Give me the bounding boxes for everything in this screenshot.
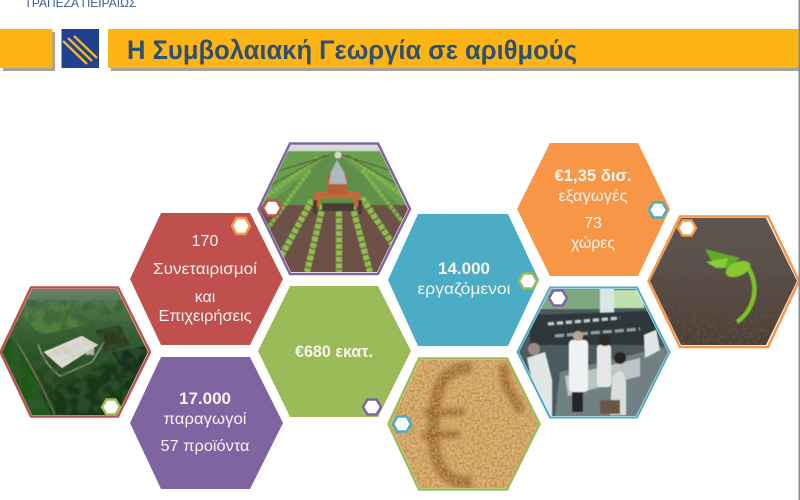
- panel: producers stat: [130, 357, 283, 489]
- panel: wheat euro photo: [388, 358, 541, 490]
- stat text: [153, 233, 257, 325]
- stat text: εργαζόμενοι: [418, 281, 511, 298]
- panel: seedling photo: [648, 216, 800, 347]
- panel: aerial farm photo: [0, 287, 150, 417]
- stat text: 14.000: [438, 259, 490, 278]
- marker: [678, 220, 696, 236]
- panel: tractor field photo: [258, 143, 411, 275]
- panel: cooperatives stat: [130, 213, 283, 345]
- panel: turnover stat: [258, 286, 411, 417]
- icon: sprout: [705, 249, 755, 322]
- marker: [263, 200, 281, 216]
- stat text: και: [195, 289, 216, 306]
- icon: bank logo: [62, 29, 99, 68]
- title: Η Συμβολαιακή Γεωργία σε αριθμούς: [127, 35, 577, 65]
- panel: laboratory photo: [517, 287, 670, 418]
- stat text: [554, 166, 632, 252]
- stat text: 57 προϊόντα: [160, 438, 250, 455]
- stat text: παραγωγοί: [164, 411, 247, 428]
- stat text: 170: [192, 233, 218, 250]
- marker: [649, 202, 667, 218]
- stat text: εξαγωγές: [558, 188, 628, 205]
- stat text: χώρες: [571, 235, 615, 252]
- marker: [393, 416, 411, 432]
- stat text: €680 εκατ.: [295, 342, 373, 361]
- title bar: [108, 29, 800, 71]
- stat text: Επιχειρήσεις: [158, 308, 252, 325]
- marker: [549, 290, 567, 306]
- marker: [519, 274, 537, 288]
- stat text: [160, 389, 250, 455]
- stat text: €1,35 δισ.: [554, 166, 632, 185]
- stat text: [418, 259, 511, 298]
- marker: [102, 400, 120, 414]
- marker: [232, 218, 250, 234]
- stat text: 17.000: [179, 389, 231, 408]
- panel: exports stat: [517, 143, 670, 276]
- panel: employees stat: [388, 214, 539, 346]
- stat text: 73: [584, 215, 602, 232]
- stat text: Συνεταιρισμοί: [153, 261, 257, 278]
- header band: [0, 29, 800, 71]
- marker: [363, 400, 381, 414]
- left yellow tab: [0, 29, 55, 71]
